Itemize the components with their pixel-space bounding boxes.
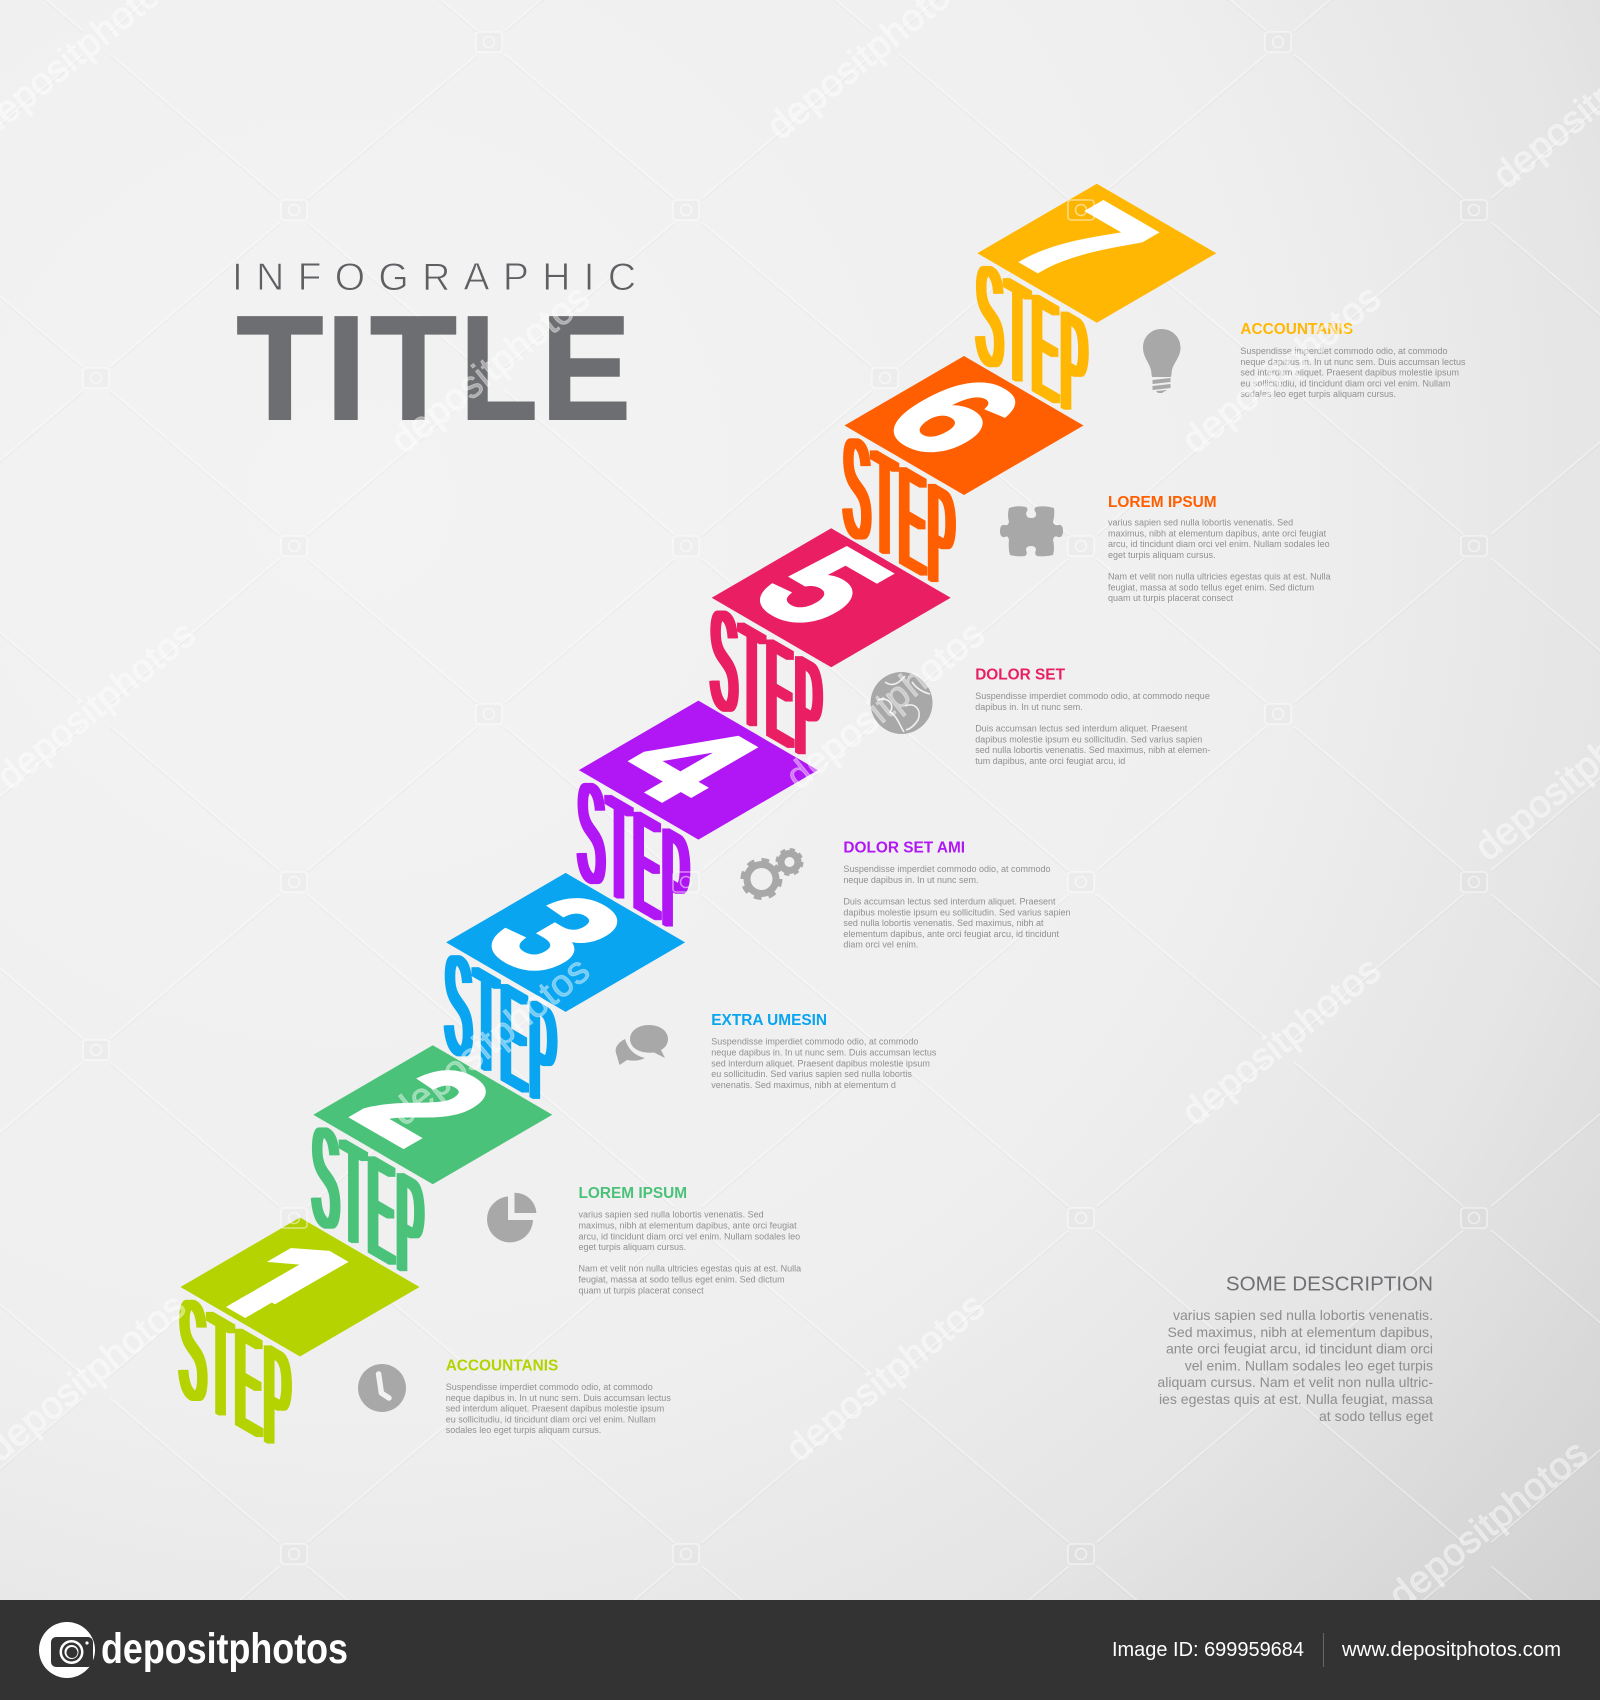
step 2 [312,1045,801,1316]
step 7 text [1240,321,1466,399]
step 6 text: feugiat, massa at sodo tellus eget enim. Sed dictum [1108,582,1314,592]
watermark wordmarks: depositphotos [1174,277,1389,462]
step 6 [844,356,1331,627]
step 6 text [1108,494,1331,603]
description block: ante orci feugiat arcu, id tincidunt diam orci [1166,1341,1433,1357]
step 5 text: sed nulla lobortis venenatis. Sed maximus, nibh at elemen- [975,745,1210,755]
footer logo icon [39,1622,95,1678]
step 4 icon: gears [743,850,802,898]
footer bar [0,1600,1600,1700]
description block: varius sapien sed nulla lobortis venenatis. [1173,1307,1433,1323]
step 5 text: dapibus molestie ipsum eu sollicitudin. Sed varius sapien [975,734,1202,744]
step 2 text: LOREM IPSUM [578,1185,687,1202]
step 2 STEP label: STEP [312,1090,426,1316]
step 1 text: Suspendisse imperdiet commodo odio, at commodo [446,1382,653,1392]
step 3 text: Suspendisse imperdiet commodo odio, at commodo [711,1037,918,1047]
step 3 STEP label: STEP [445,918,559,1144]
step 1 number: 1 [178,1222,390,1344]
step 1 tile [180,1218,420,1356]
footer divider [1323,1633,1324,1667]
watermark camera marks [83,32,1487,1564]
step 6 tile [844,356,1084,495]
step 5 text [975,667,1210,766]
footer image id: Image ID: 699959684 [1112,1639,1304,1661]
step 4 text: dapibus molestie ipsum eu sollicitudin. Sed varius sapien [843,907,1071,917]
step 1 text: neque dapibus in. In ut nunc sem. Duis accumsan lectus [446,1393,671,1403]
step 6 text: maximus, nibh at elementum dapibus, ante orci feugiat [1108,528,1327,538]
step 3 tile [446,873,685,1012]
watermark wordmarks: depositphotos [778,1285,993,1470]
description block: at sodo tellus eget [1319,1408,1433,1424]
step 3 text [711,1012,937,1090]
step 6 STEP label: STEP [844,401,957,627]
description block [1157,1272,1433,1424]
step 4 text: DOLOR SET AMI [843,840,965,857]
step 4 text: Duis accumsan lectus sed interdum aliquet. Praesent [843,896,1056,906]
description block: SOME DESCRIPTION [1226,1272,1433,1296]
step 2 text [578,1185,801,1295]
step 3 [445,873,937,1144]
step 7 [976,183,1466,455]
watermark wordmarks: depositphotos [383,277,598,462]
step 5 text: tum dapibus, ante orci feugiat arcu, id [975,756,1125,766]
step 6 text: LOREM IPSUM [1108,494,1217,511]
watermark wordmarks: depositphotos [383,949,598,1134]
title line: TITLE: T [370,285,457,451]
step 4 number: 4 [582,702,793,824]
step 5 STEP label: STEP [711,573,824,799]
step 2 text: arcu, id tincidunt diam orci vel enim. Nullam sodales leo [578,1231,800,1241]
step 1 [178,1218,671,1488]
step 7 text: sed interdum aliquet. Praesent dapibus molestie ipsum [1240,368,1459,378]
step 3 text: neque dapibus in. In ut nunc sem. Duis accumsan lectus [711,1047,937,1057]
step 3 text: eu sollicitudin. Sed varius sapien sed nulla lobortis [711,1069,912,1079]
step 6 number: 6 [847,356,1058,478]
step 6 text: Nam et velit non nulla ultricies egestas quis at est. Nulla [1108,572,1331,582]
step 4 tile [579,701,818,840]
step 7 text: neque dapibus in. In ut nunc sem. Duis accumsan lectus [1240,357,1466,367]
title line: TITLE [236,285,631,451]
step 3 icon: speech bubbles [616,1025,668,1065]
step 1 text: sed interdum aliquet. Praesent dapibus molestie ipsum [446,1404,664,1414]
description block: aliquam cursus. Nam et velit non nulla ultric- [1157,1374,1433,1390]
step 5 text: Suspendisse imperdiet commodo odio, at commodo neque [975,691,1210,701]
step 4 text: Suspendisse imperdiet commodo odio, at commodo [843,864,1051,874]
step 4 text [843,840,1071,950]
step 4 text: neque dapibus in. In ut nunc sem. [843,875,978,885]
step 7 tile [977,184,1216,323]
step 5 [711,527,1210,799]
step 4 text: sed nulla lobortis venenatis. Sed maximus, nibh at [843,918,1044,928]
watermark wordmarks: depositphotos [1381,1432,1596,1617]
description block: Sed maximus, nibh at elementum dapibus, [1168,1324,1433,1340]
step 2 icon: pie chart [487,1193,536,1242]
step 6 text: varius sapien sed nulla lobortis venenatis. Sed [1108,518,1293,528]
step 7 text: ACCOUNTANIS [1240,321,1353,338]
step 4 [578,701,1071,971]
step 1 icon: clock [358,1364,406,1412]
step 4 text: diam orci vel enim. [843,940,918,950]
step 4 STEP label: STEP [578,746,691,971]
step 7 icon: light bulb [1143,329,1180,393]
step 2 text: Nam et velit non nulla ultricies egestas quis at est. Nulla [578,1264,801,1274]
step 3 number: 3 [449,873,660,996]
step 2 number: 2 [320,1045,529,1166]
step 2 text: maximus, nibh at elementum dapibus, ante orci feugiat [578,1220,797,1230]
step 1 text [446,1358,671,1435]
step 7 text: Suspendisse imperdiet commodo odio, at commodo [1240,346,1448,356]
step 2 text: varius sapien sed nulla lobortis venenatis. Sed [578,1210,764,1220]
step 1 text: ACCOUNTANIS [446,1358,558,1374]
title [232,256,636,451]
step 7 text: sodales leo eget turpis aliquam cursus. [1240,389,1396,399]
step 5 icon: globe [870,672,932,734]
description block: vel enim. Nullam sodales leo eget turpis [1185,1357,1433,1373]
step 6 text: eget turpis aliquam cursus. [1108,550,1216,560]
step 1 STEP label: STEP [180,1263,293,1488]
title line: INFOGRAPHIC: INFOGRAPHIC [232,256,636,299]
step 1 text: sodales leo eget turpis aliquam cursus. [446,1425,601,1435]
step 2 text: quam ut turpis placerat consect [578,1285,704,1295]
step 2 tile [313,1045,552,1184]
step 7 text: eu sollicitudiu, id tincidunt diam orci vel enim. Nullam [1240,378,1450,388]
step 3 text: EXTRA UMESIN [711,1012,827,1029]
step 7 number: 7 [977,183,1189,306]
step 2 text: feugiat, massa at sodo tellus eget enim. Sed dictum [578,1274,785,1284]
step 6 icon: puzzle piece [1000,506,1063,556]
step 3 text: sed interdum aliquet. Praesent dapibus molestie ipsum [711,1058,930,1068]
title line: TITLE: T [236,285,323,451]
step 5 text: dapibus in. In ut nunc sem. [975,702,1083,712]
watermark wordmarks: depositphotos [1174,949,1389,1134]
step 3 text: venenatis. Sed maximus, nibh at elementum d [711,1080,896,1090]
step 5 tile [712,528,951,667]
title line: TITLE: I [326,286,367,451]
step 5 text: DOLOR SET [975,667,1066,684]
step 6 text: quam ut turpis placerat consect [1108,593,1234,603]
title line: TITLE: L [460,286,538,451]
watermark wordmarks: depositphotos [778,613,993,798]
step 5 number: 5 [717,527,927,648]
description block: ies egestas quis at est. Nulla feugiat, massa [1159,1391,1433,1407]
step 2 text: eget turpis aliquam cursus. [578,1242,686,1252]
title line: TITLE: E [541,285,631,450]
step 6 text: arcu, id tincidunt diam orci vel enim. Nullam sodales leo [1108,539,1330,549]
footer url: www.depositphotos.com [1341,1639,1561,1661]
footer logo wordmark: depositphotos [101,1625,348,1673]
step 1 text: eu sollicitudiu, id tincidunt diam orci vel enim. Nullam [446,1414,656,1424]
step 7 STEP label: STEP [976,229,1090,455]
step 4 text: elementum dapibus, ante orci feugiat arcu, id tincidunt [843,929,1060,939]
step 5 text: Duis accumsan lectus sed interdum aliquet. Praesent [975,724,1188,734]
